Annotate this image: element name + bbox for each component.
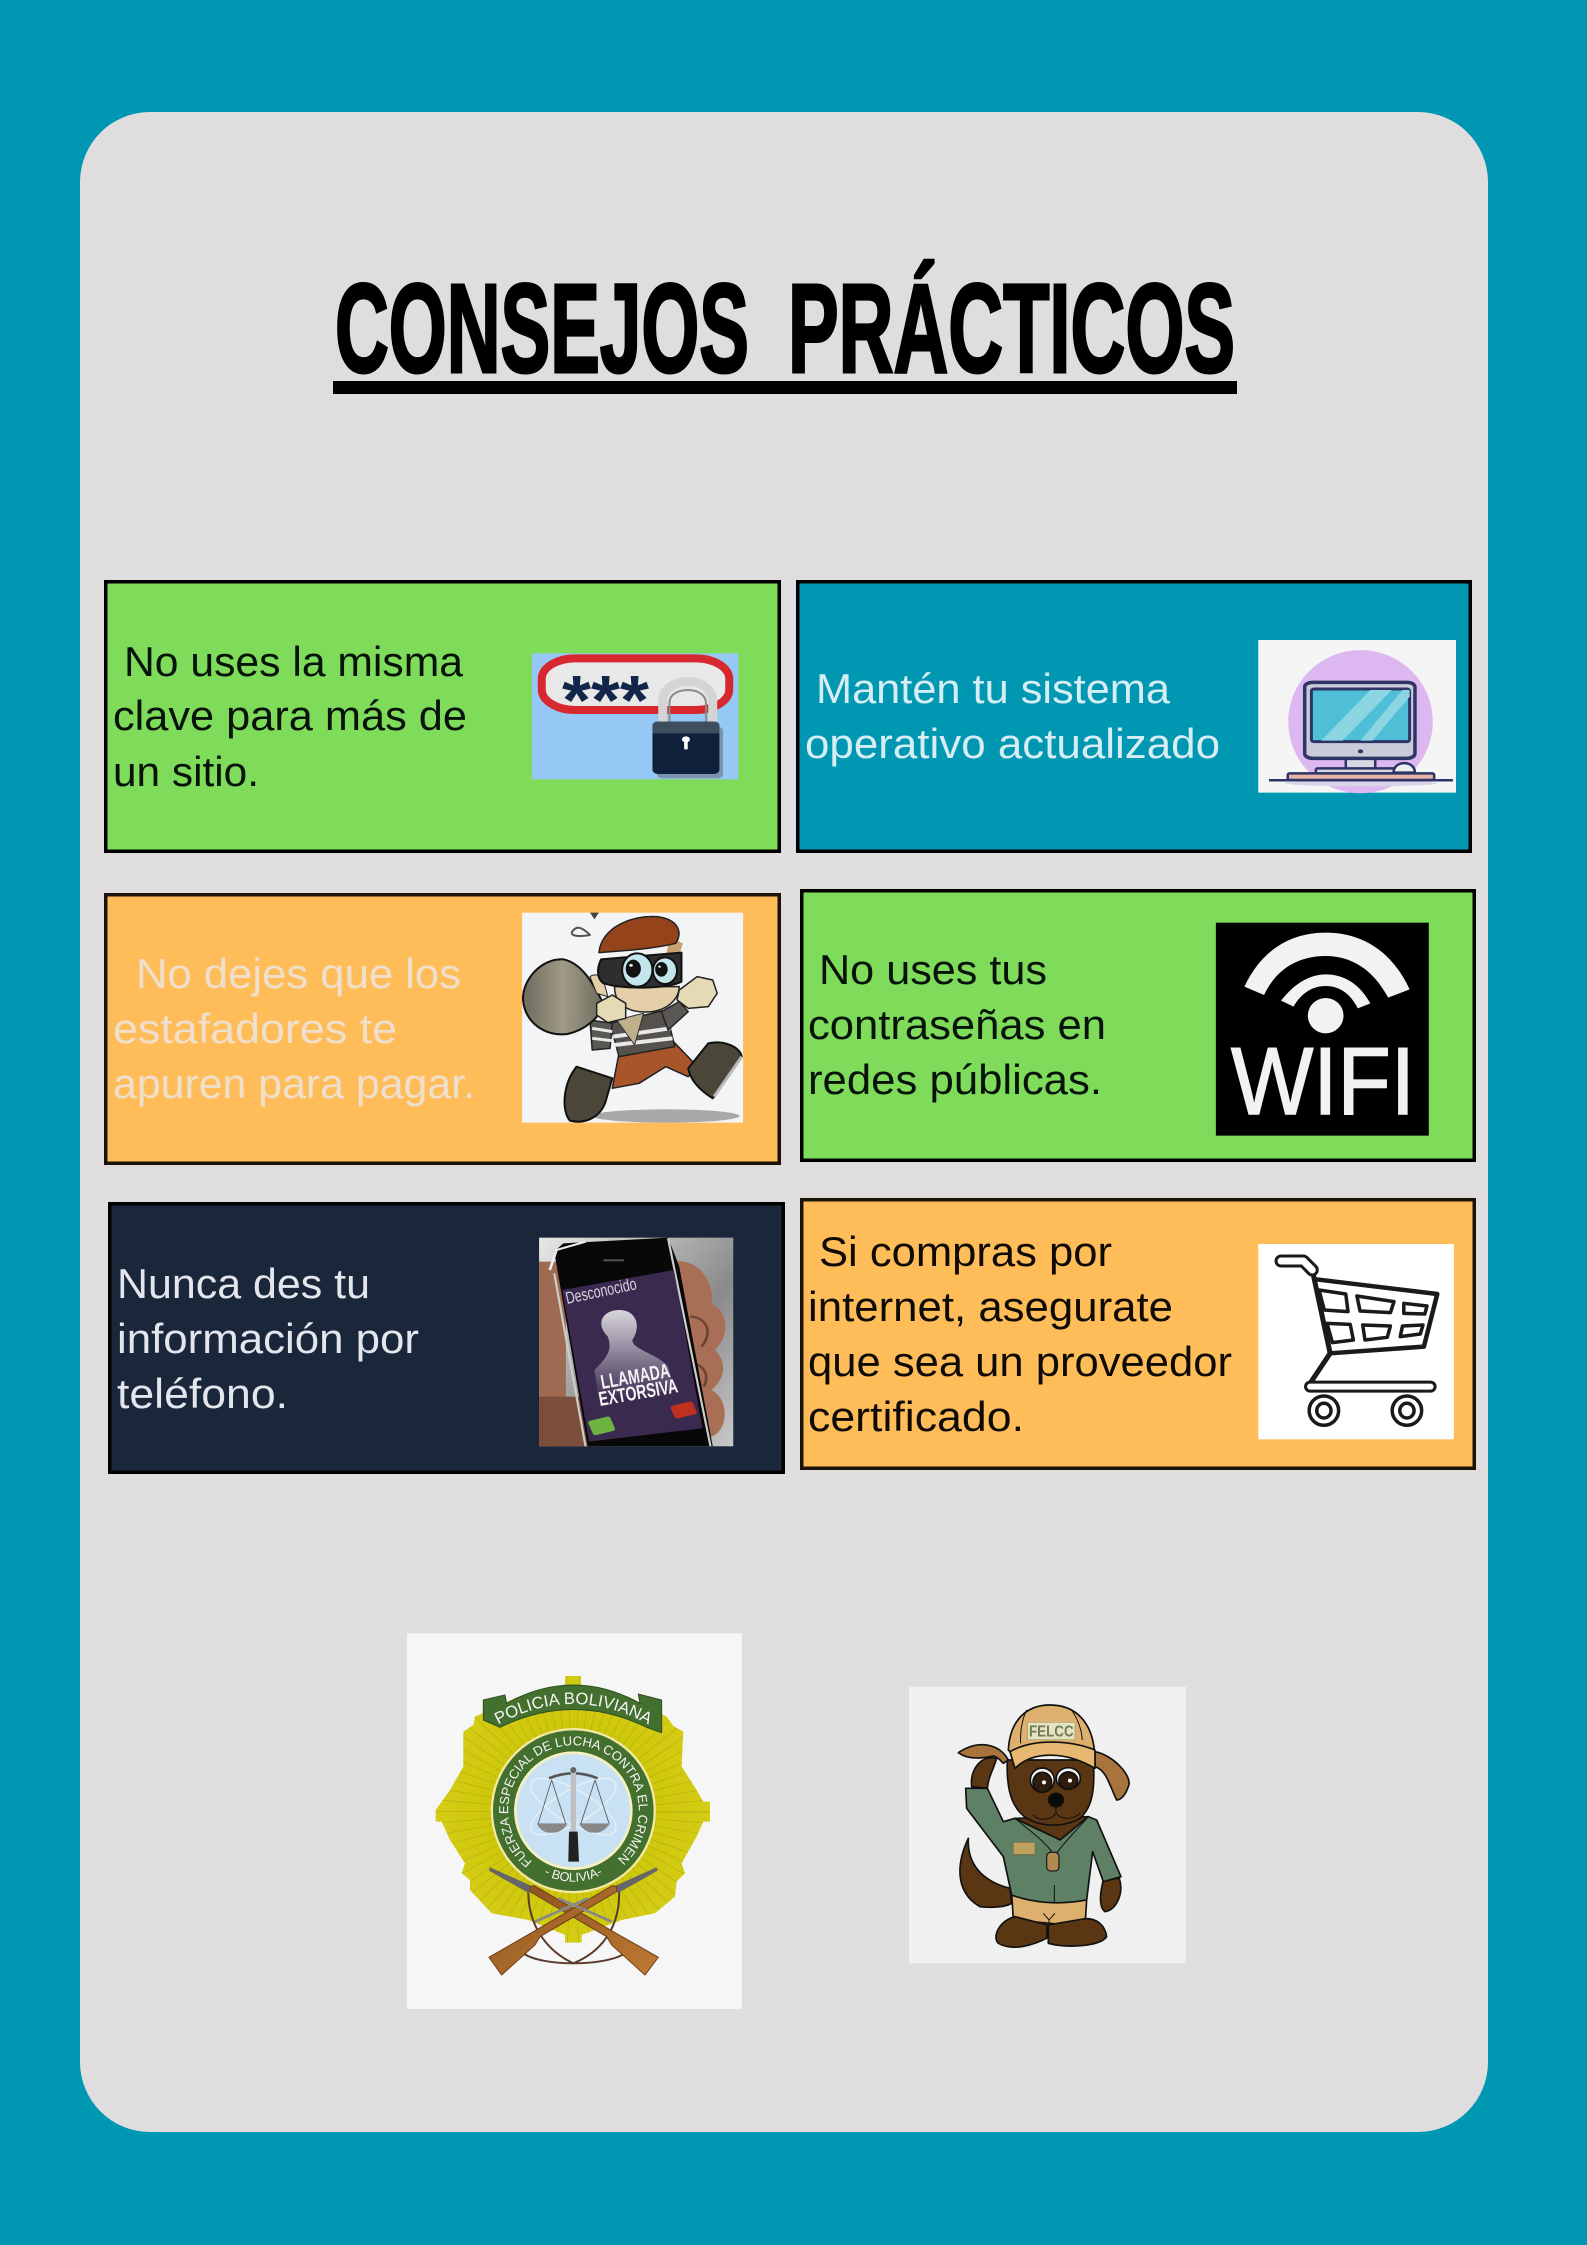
text: misma clave: un sitio. <box>113 748 259 795</box>
text: misma clave <box>113 638 467 795</box>
text: estafadores: No dejes que los <box>136 950 461 997</box>
infographic page <box>80 112 1488 2132</box>
crossed rifles <box>489 1867 658 1975</box>
panel: wifi <box>802 891 1474 1160</box>
title: PRÁCTICOS <box>788 258 1235 399</box>
text: telefono: teléfono. <box>117 1370 288 1417</box>
panel: telefono <box>110 1204 783 1472</box>
logo: FELCC dog mascot: FELCC <box>1029 1724 1074 1741</box>
main grey panel <box>80 112 1488 2132</box>
panel: compras por internet <box>802 1200 1474 1468</box>
text: wifi <box>808 946 1106 1103</box>
text: misma clave: No uses la misma <box>124 638 464 685</box>
logo: FELCC dog mascot <box>909 1687 1186 1963</box>
icon: extortion call phone <box>539 1238 733 1446</box>
text: misma clave: clave para más de <box>113 692 467 739</box>
text: estafadores: estafadores te <box>113 1005 397 1052</box>
panel: sistema operativo <box>798 582 1470 851</box>
icon: wifi sign <box>1216 923 1429 1136</box>
text: estafadores <box>113 950 475 1107</box>
text: telefono <box>117 1260 419 1417</box>
text: sistema operativo <box>805 665 1220 767</box>
text: sistema operativo: operativo actualizado <box>805 720 1220 767</box>
icon: extortion call phone: LLAMADA <box>599 1360 672 1394</box>
text: compras por internet: que sea un proveedor <box>808 1338 1232 1385</box>
text: compras por internet: Si compras por <box>819 1228 1112 1275</box>
text: telefono: información por <box>117 1315 419 1362</box>
text: wifi: No uses tus <box>819 946 1047 993</box>
text: wifi: contraseñas en <box>808 1001 1106 1048</box>
icon: running thief <box>522 913 743 1123</box>
ribbon: POLICIA BOLIVIANA <box>494 1692 650 1724</box>
icon: password lock: *** <box>562 661 650 739</box>
text: compras por internet: certificado. <box>808 1393 1024 1440</box>
panel: misma clave <box>106 582 779 851</box>
icon: shopping cart <box>1258 1244 1454 1439</box>
text: compras por internet: internet, asegurate <box>808 1283 1173 1330</box>
text: compras por internet <box>808 1228 1232 1440</box>
text: telefono: Nunca des tu <box>117 1260 370 1307</box>
logo: policia boliviana FELCC badge: FUERZA ESPECIAL DE LUCHA CONTRA EL CRIMEN <box>499 1736 648 1868</box>
logo: policia boliviana FELCC badge <box>407 1634 742 2009</box>
text: sistema operativo: Mantén tu sistema <box>816 665 1171 712</box>
text: wifi: redes públicas. <box>808 1056 1102 1103</box>
scales of justice <box>523 1767 624 1862</box>
logo: policia boliviana FELCC badge: - BOLIVIA- <box>546 1869 602 1882</box>
icon: extortion call phone: EXTORSIVA <box>597 1375 680 1411</box>
icon: wifi sign: WIFI <box>1231 1028 1415 1135</box>
icon: password lock <box>532 653 738 779</box>
text: estafadores: apuren para pagar. <box>113 1060 475 1107</box>
panel: estafadores <box>106 895 779 1163</box>
title: CONSEJOS <box>335 258 749 399</box>
icon: computer <box>1258 640 1456 793</box>
icon: extortion call phone: Desconocido <box>564 1274 638 1308</box>
